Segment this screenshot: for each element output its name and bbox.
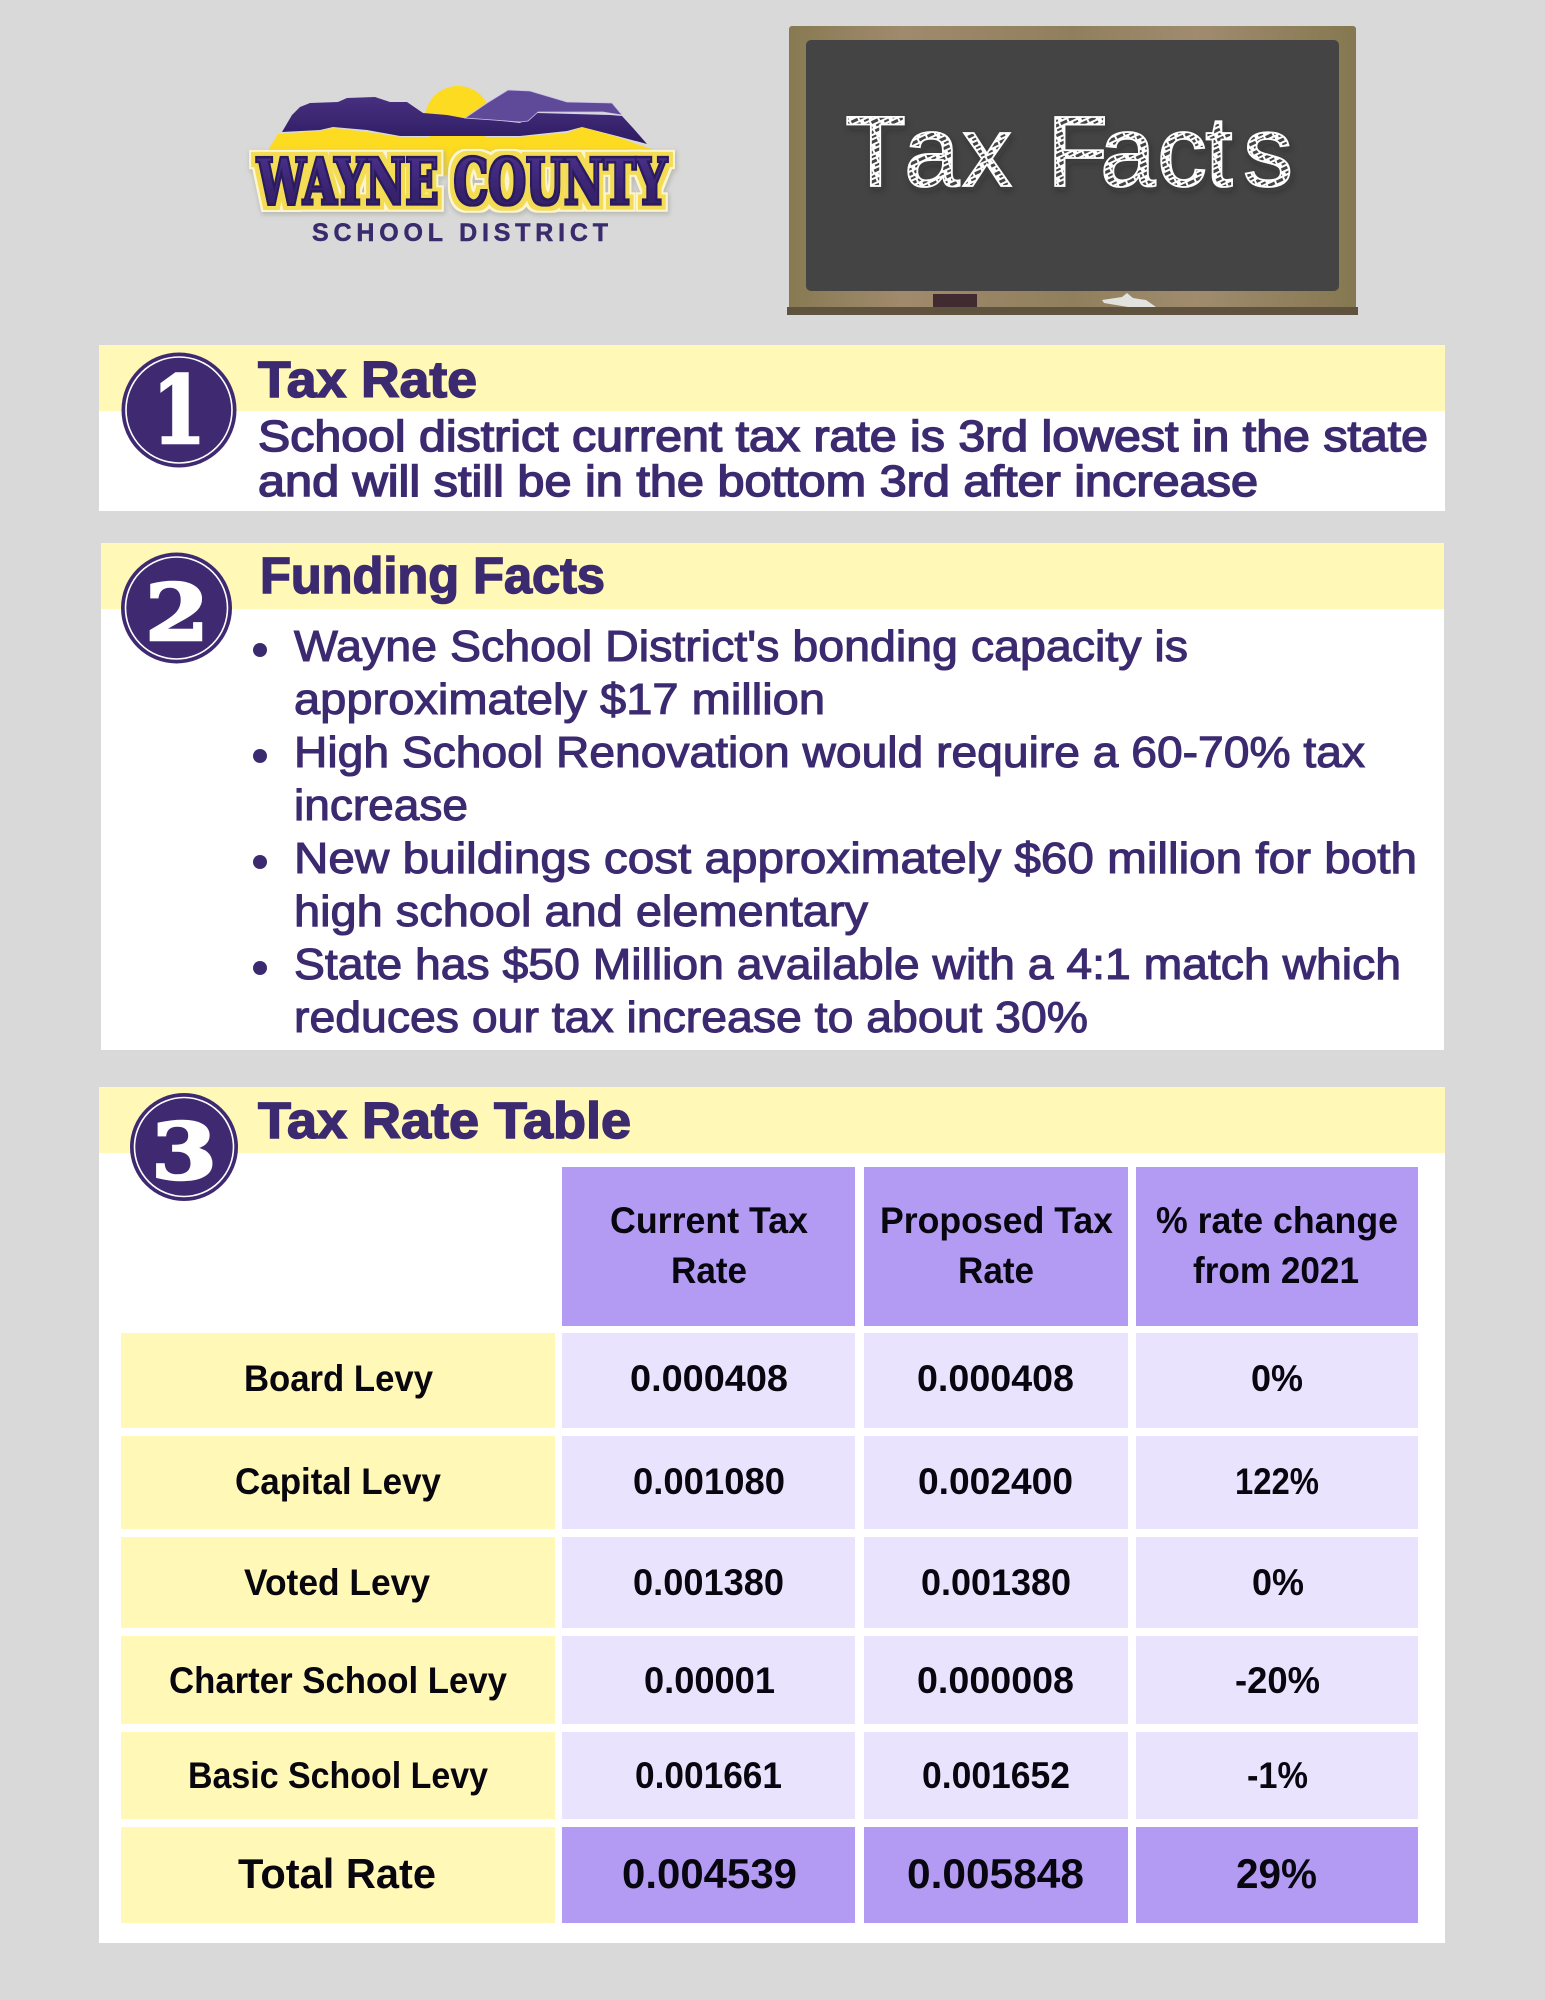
row: board levy: 0% bbox=[1251, 1358, 1303, 1399]
chalk pieces bbox=[1102, 293, 1156, 307]
number badge 3: 3 bbox=[151, 1107, 217, 1198]
row: basic school levy: -1% bbox=[1247, 1755, 1308, 1796]
bullet: new buildings bbox=[253, 834, 1417, 936]
icon: rising sun bbox=[425, 86, 491, 152]
row: voted levy: 0.001380 bbox=[921, 1562, 1071, 1603]
title: Tax Facts: Tax Facts bbox=[845, 96, 1293, 208]
logo subtitle: SCHOOL DISTRICT bbox=[312, 219, 608, 247]
row: voted levy bbox=[121, 1537, 1418, 1628]
header: rate change bbox=[1136, 1167, 1418, 1326]
heading: Tax Rate: Tax Rate bbox=[258, 351, 477, 408]
row: capital levy: Capital Levy bbox=[235, 1461, 441, 1502]
bullet: bonding capacity: Wayne School District's bonding capacity is bbox=[294, 622, 1188, 671]
body text: School district current tax rate is 3rd lowest in the state bbox=[258, 412, 1428, 461]
icon: dark mountains bbox=[282, 97, 647, 144]
bullet: state match: reduces our tax increase to about 30% bbox=[294, 993, 1088, 1042]
header: rate change: % rate change bbox=[1156, 1200, 1398, 1241]
number badge 1 bbox=[122, 352, 236, 468]
row: total rate: 0.004539 bbox=[622, 1850, 797, 1897]
icon: yellow foothills bbox=[268, 127, 654, 175]
header: current tax rate: Rate bbox=[671, 1250, 747, 1291]
row: voted levy: 0% bbox=[1252, 1562, 1304, 1603]
row: board levy: 0.000408 bbox=[917, 1358, 1074, 1399]
chalkboard frame bbox=[789, 26, 1356, 310]
row: total rate: Total Rate bbox=[238, 1850, 436, 1897]
body text bbox=[258, 412, 1428, 506]
header: current tax rate: Current Tax bbox=[610, 1200, 808, 1241]
row: basic school levy: 0.001652 bbox=[922, 1755, 1070, 1796]
row: board levy: 0.000408 bbox=[630, 1358, 788, 1399]
header: proposed tax rate: Proposed Tax bbox=[880, 1200, 1113, 1241]
heading band bbox=[99, 345, 1445, 411]
bullet: renovation bbox=[253, 728, 1365, 830]
body text: and will still be in the bottom 3rd after increase bbox=[258, 457, 1258, 506]
bullet: state match: State has $50 Million available with a 4:1 match which bbox=[294, 940, 1401, 989]
row: basic school levy: Basic School Levy bbox=[188, 1755, 488, 1796]
number badge 2 bbox=[121, 552, 232, 664]
header: current tax rate bbox=[562, 1167, 855, 1326]
bullet: renovation: High School Renovation would require a 60-70% tax bbox=[294, 728, 1365, 777]
row: charter school levy bbox=[121, 1636, 1418, 1724]
row: board levy: Board Levy bbox=[244, 1358, 433, 1399]
icon: light mountain bbox=[465, 90, 622, 122]
chalkboard bbox=[787, 26, 1358, 315]
header: proposed tax rate bbox=[864, 1167, 1128, 1326]
row: total rate: 0.005848 bbox=[907, 1850, 1084, 1897]
row: charter school levy: 0.00001 bbox=[644, 1660, 775, 1701]
row: charter school levy: -20% bbox=[1235, 1660, 1320, 1701]
row: total rate: 29% bbox=[1236, 1850, 1317, 1897]
bullet: new buildings: New buildings cost approximately $60 million for both bbox=[294, 834, 1417, 883]
panel 3: tax rate table bbox=[99, 1087, 1445, 1943]
bullet: bonding capacity bbox=[253, 622, 1188, 724]
heading band bbox=[99, 1087, 1445, 1153]
header: proposed tax rate: Rate bbox=[958, 1250, 1034, 1291]
number badge 1: 1 bbox=[152, 356, 206, 466]
heading band bbox=[101, 543, 1444, 609]
header: rate change: from 2021 bbox=[1193, 1250, 1359, 1291]
bullet: state match bbox=[253, 940, 1401, 1042]
row: total rate bbox=[121, 1827, 1418, 1923]
row: board levy bbox=[121, 1333, 1418, 1428]
row: charter school levy: Charter School Levy bbox=[169, 1660, 507, 1701]
panel 2: funding facts bbox=[101, 543, 1444, 1050]
bullet: renovation: increase bbox=[294, 781, 468, 830]
row: capital levy bbox=[121, 1436, 1418, 1529]
heading: Funding Facts: Funding Facts bbox=[260, 547, 605, 604]
table bbox=[121, 1167, 1418, 1923]
bullet: bonding capacity: approximately $17 million bbox=[294, 675, 825, 724]
panel 1: tax rate bbox=[99, 345, 1445, 511]
row: capital levy: 122% bbox=[1235, 1461, 1319, 1502]
row: basic school levy bbox=[121, 1732, 1418, 1819]
row: charter school levy: 0.000008 bbox=[917, 1660, 1074, 1701]
eraser bbox=[933, 294, 977, 307]
logo wordmark: WAYNE COUNTY bbox=[256, 145, 668, 220]
row: capital levy: 0.002400 bbox=[918, 1461, 1073, 1502]
row: voted levy: 0.001380 bbox=[633, 1562, 784, 1603]
number badge 2: 2 bbox=[145, 568, 209, 659]
row: basic school levy: 0.001661 bbox=[635, 1755, 782, 1796]
row: voted levy: Voted Levy bbox=[244, 1562, 430, 1603]
chalkboard surface bbox=[806, 40, 1339, 291]
bullet: new buildings: high school and elementary bbox=[294, 887, 868, 936]
row: capital levy: 0.001080 bbox=[633, 1461, 785, 1502]
number badge 3 bbox=[130, 1093, 238, 1201]
heading: Tax Rate Table: Tax Rate Table bbox=[258, 1092, 631, 1149]
logo: Wayne County School District bbox=[256, 86, 668, 247]
chalk tray bbox=[787, 307, 1358, 315]
